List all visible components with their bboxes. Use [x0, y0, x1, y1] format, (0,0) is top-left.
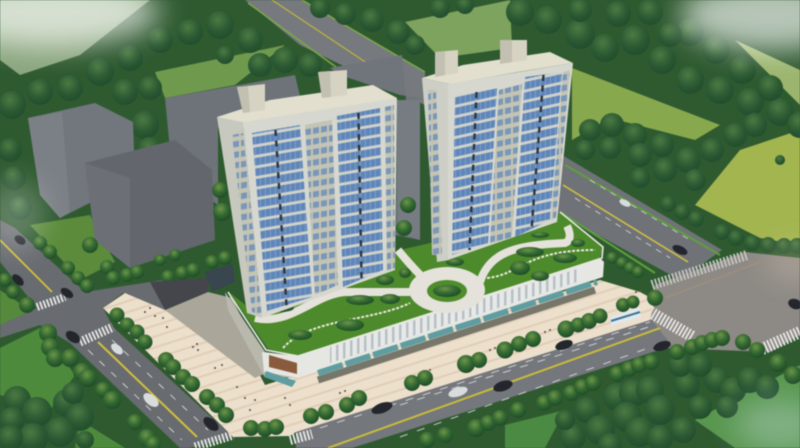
background building: rear centre: [165, 55, 420, 240]
left wing core: [470, 92, 476, 250]
right wing core: [532, 75, 544, 230]
left wing windows: [452, 88, 497, 255]
right wing core: [358, 113, 362, 279]
central lawn: [427, 280, 467, 302]
garden path: [255, 226, 570, 319]
shop canopies: [318, 282, 597, 373]
wall and trees beside side lot: [0, 182, 416, 313]
roof: [422, 52, 573, 84]
facade frame: [243, 98, 397, 318]
right wing windows: [515, 72, 562, 237]
road: upper right: [556, 155, 722, 280]
stepping stones: [283, 250, 595, 348]
roundabout: [409, 267, 485, 313]
lower forest right: [555, 353, 779, 448]
rooftop structures: [435, 40, 527, 77]
left wing core: [276, 130, 286, 306]
crosswalks: [37, 255, 800, 447]
garden lawn: [230, 213, 603, 356]
shop fronts: [318, 290, 595, 380]
right wing windows: [337, 108, 383, 287]
garden shrubs: [266, 232, 585, 340]
podium with roof garden: [225, 212, 604, 387]
background building: far left: [28, 103, 135, 218]
corner canopy: [264, 371, 296, 387]
facade fins: [330, 268, 580, 363]
plaza: [103, 264, 655, 437]
people on plaza: [144, 290, 641, 411]
facade frame: [448, 63, 573, 260]
recess windows: [490, 84, 522, 244]
light cars: [109, 198, 632, 410]
left wing windows: [252, 125, 312, 311]
podium left wall: [225, 292, 298, 378]
street trees: [39, 252, 800, 448]
outer left windows: [232, 133, 262, 315]
rooftop structures: [237, 70, 347, 113]
recess windows: [305, 120, 338, 295]
billboard: [269, 355, 297, 374]
parapets: [228, 212, 603, 356]
side windows: [385, 105, 395, 271]
intersection paving: [648, 252, 800, 352]
outer left face: [422, 78, 450, 262]
side windows: [551, 70, 570, 220]
road: left junction: [0, 220, 233, 448]
vehicles: [10, 198, 800, 434]
lower forest left: [0, 382, 94, 448]
tower: left: [217, 70, 397, 318]
road: top diagonal: [245, 0, 425, 105]
tower: right: [422, 40, 573, 262]
cars: [10, 233, 800, 434]
roof: [217, 85, 397, 128]
road: lower main: [296, 318, 672, 448]
bus: [610, 307, 641, 326]
outer left face: [217, 117, 262, 318]
left side windows: [428, 90, 442, 255]
background forest: [0, 0, 800, 254]
podium front wall: [262, 258, 604, 378]
background building: left front: [85, 140, 215, 268]
